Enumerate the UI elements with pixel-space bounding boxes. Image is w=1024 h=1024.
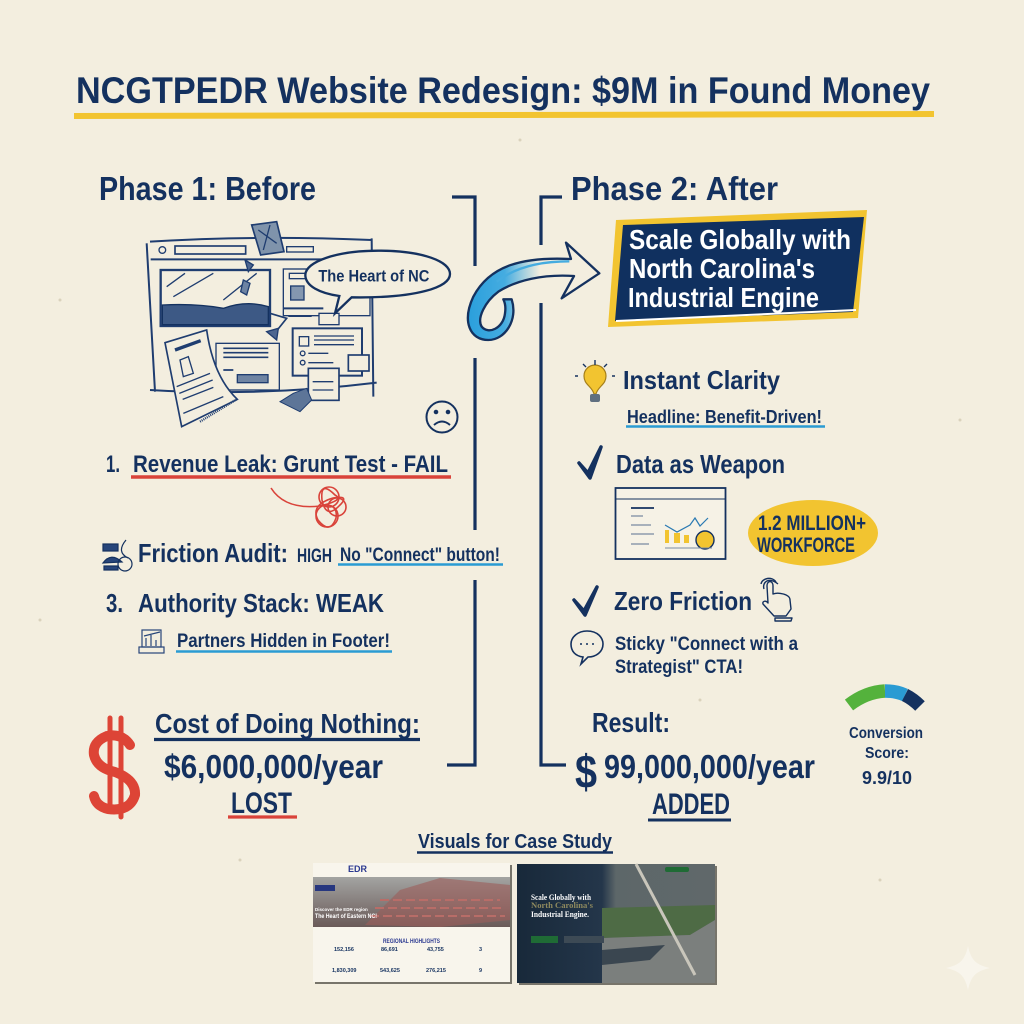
item: zero friction: Zero Friction [614,586,752,616]
result: $ [575,745,597,798]
title: NCGTPEDR Website Redesign: $9M in Found Money [76,70,930,111]
cost of doing nothing: $6,000,000/year [164,748,383,785]
screenshot: after site [517,864,717,985]
screenshot: after site: Industrial Engine. [531,909,589,919]
screenshot: before site: 9 [479,968,482,974]
screenshot: before site: 543,625 [380,968,400,974]
screenshot: before site: 3 [479,947,482,953]
icon: sad face [426,402,458,432]
item 3: authority stack: Authority Stack: WEAK [138,588,384,618]
headline box: Industrial Engine [628,282,819,313]
item: data as weapon: Data as Weapon [616,449,785,479]
headline box: North Carolina's [629,253,815,284]
result [575,707,815,821]
icon: check mark [579,447,601,478]
item 2: friction audit: Friction Audit: [138,538,288,568]
screenshot: before site: 1,830,309 [332,968,356,974]
cost of doing nothing [154,708,420,820]
text: conversion score [849,725,923,788]
panel: phase 1 before [94,170,503,820]
screenshot: before site: 276,215 [426,968,446,974]
screenshot: before site: EDR [348,864,368,874]
heading: phase 1: Phase 1: Before [99,170,316,207]
headline box [608,210,867,327]
item 3: authority stack: 3. [106,588,123,618]
screenshot: before site [313,863,512,984]
icon: sparkle watermark [946,946,990,990]
screenshot: before site: 152,156 [334,947,354,953]
sketch: broken website [147,222,450,427]
icon: pointing hand [761,578,792,621]
icon: tangled red string [271,487,346,527]
item 1: revenue leak: 1. [106,451,120,478]
icon: light bulb [575,360,615,402]
icon: footer chart [139,630,164,653]
icon: red dollar sign [94,718,135,817]
text: conversion score: Conversion [849,725,923,742]
callout: workforce: 1.2 MILLION+ [758,512,866,535]
cost of doing nothing: Cost of Doing Nothing: [155,708,420,739]
item 2: friction audit [103,538,503,571]
item: instant clarity [623,365,825,427]
item: instant clarity: Headline: Benefit-Driven! [627,407,822,427]
divider bracket left [447,197,475,765]
text: sticky CTA [615,634,798,678]
screenshot: before site: REGIONAL HIGHLIGHTS [383,939,440,945]
cost of doing nothing: LOST [231,787,292,820]
text: sticky CTA: Sticky "Connect with a [615,634,798,655]
text: conversion score: Score: [865,745,909,762]
item 2: friction audit: HIGH [297,546,332,567]
result: Result: [592,707,670,738]
result: 99,000,000/year [604,748,815,785]
screenshot: before site: 43,755 [427,947,444,953]
item 2: friction audit: No "Connect" button! [340,545,500,566]
text: conversion score: 9.9/10 [862,768,912,788]
screenshot: before site: 86,691 [381,947,398,953]
arrow: before to after [468,243,599,340]
icon: tangled machine [103,540,132,571]
item 1: revenue leak: Revenue Leak: Grunt Test - FAIL [133,451,448,478]
speech bubble: The Heart of NC: The Heart of NC [318,267,429,286]
result: ADDED [652,788,730,821]
item 3: authority stack [106,588,392,653]
screenshot: before site: Discover the EDR region [315,907,368,912]
callout: workforce: WORKFORCE [757,534,855,557]
icon: chat bubble [571,631,603,664]
heading: phase 2: Phase 2: After [571,170,778,207]
headline box: Scale Globally with [629,224,851,255]
gauge: conversion score [849,691,920,706]
callout: workforce [748,500,878,566]
item 3: authority stack: Partners Hidden in Footer! [177,631,390,652]
heading: visuals: Visuals for Case Study [418,831,613,853]
panel: visuals for case study [313,831,717,985]
screenshot: before site: The Heart of Eastern NC! [315,914,377,920]
item: instant clarity: Instant Clarity [623,365,780,395]
speech bubble: The Heart of NC [305,251,450,313]
screenshot: after site: Scale Globally with [531,892,591,902]
icon: dashboard browser [616,488,726,559]
icon: check mark [574,587,597,615]
divider bracket right [541,197,566,765]
text: sticky CTA: Strategist" CTA! [615,657,743,678]
screenshot: after site: North Carolina's [531,900,594,910]
panel: phase 2 after [541,170,923,821]
